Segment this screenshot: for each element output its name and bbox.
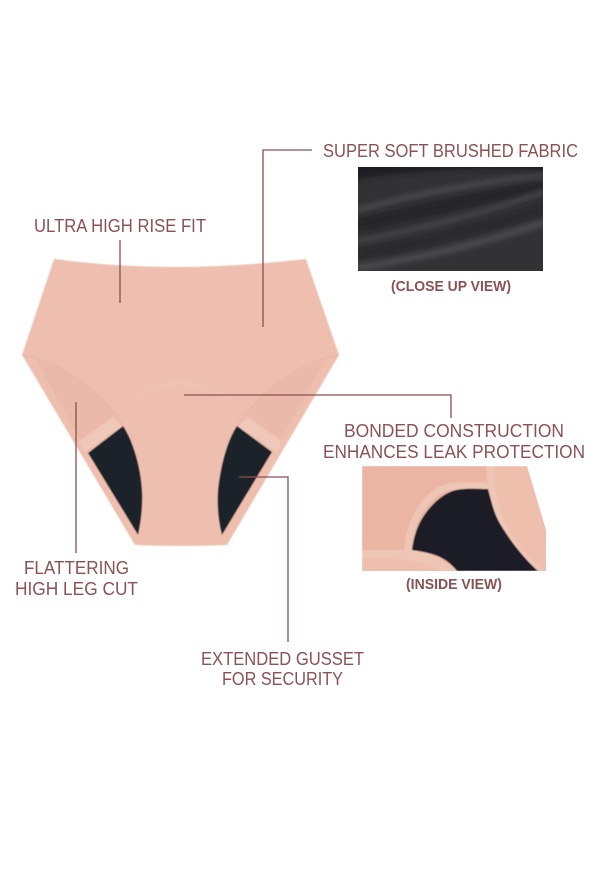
label: extended gusset — [201, 649, 364, 689]
left black gusset — [88, 426, 142, 535]
label: extended gusset: EXTENDED GUSSET — [201, 649, 364, 669]
right black gusset — [218, 426, 272, 535]
leader line: gusset — [239, 477, 288, 642]
label: super soft brushed fabric: SUPER SOFT BRUSHED FABRIC — [323, 141, 578, 161]
caption: inside view: (INSIDE VIEW) — [406, 576, 502, 593]
leader line: high leg cut — [75, 402, 77, 553]
bottom binding — [362, 550, 458, 572]
label: bonded construction: ENHANCES LEAK PROTECTION — [323, 442, 585, 462]
label: ultra high rise fit: ULTRA HIGH RISE FIT — [34, 216, 206, 236]
label: flattering high leg cut: HIGH LEG CUT — [15, 579, 138, 599]
label: bonded construction: BONDED CONSTRUCTION — [344, 421, 564, 441]
right binding — [490, 466, 542, 573]
label: flattering high leg cut: FLATTERING — [24, 558, 129, 578]
bottom lining — [362, 558, 442, 571]
label: flattering high leg cut — [15, 558, 138, 599]
left mesh panel — [36, 360, 112, 440]
right lining panel — [494, 466, 546, 571]
left binding — [80, 418, 123, 452]
brief outer shape — [22, 259, 339, 546]
label: extended gusset: FOR SECURITY — [222, 669, 343, 689]
inside view photo — [362, 466, 548, 573]
left leg seam — [22, 355, 123, 426]
bonded gusset shading — [135, 384, 226, 400]
right binding — [238, 418, 281, 452]
fabric close up photo — [358, 167, 543, 271]
caption: close up view: (CLOSE UP VIEW) — [391, 278, 511, 295]
right mesh panel — [249, 360, 325, 440]
top binding — [408, 486, 491, 552]
right leg seam — [237, 355, 339, 426]
leader line: ultra high rise — [119, 240, 121, 303]
label: bonded construction — [323, 421, 585, 462]
leader line: bonded construction — [184, 395, 451, 418]
black gusset — [412, 489, 538, 571]
leader line: fabric — [263, 150, 312, 327]
product: high rise brief — [22, 259, 339, 546]
